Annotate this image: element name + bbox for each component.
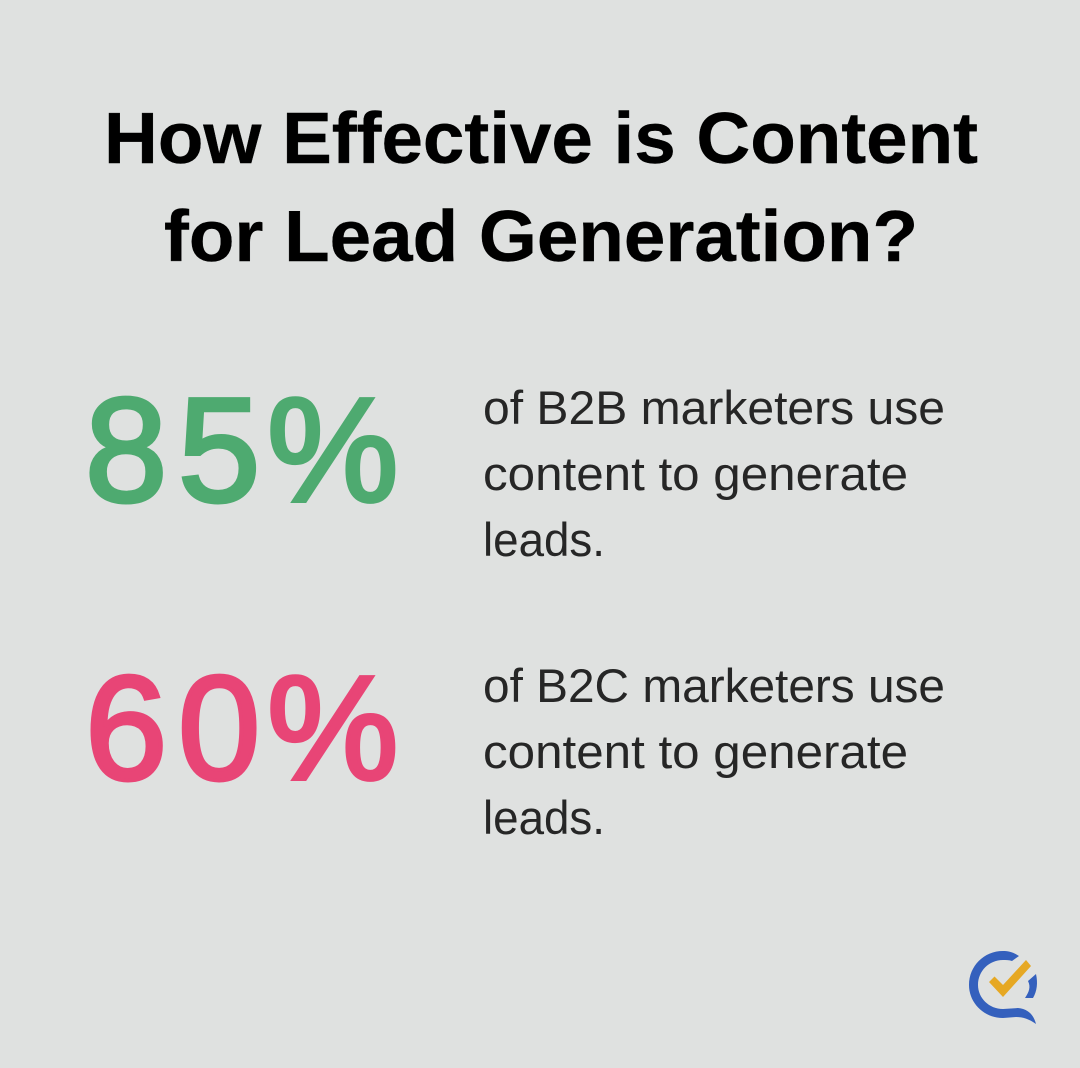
stat number: 60%: 60% xyxy=(85,646,399,811)
stat description: B2C: leads. xyxy=(483,791,605,844)
stat description: B2B xyxy=(483,381,945,566)
title: How Effective is Content xyxy=(104,99,978,179)
title: for Lead Generation? xyxy=(164,197,918,277)
stat description: B2C: content to generate xyxy=(483,725,908,778)
stat description: B2B: of B2B marketers use xyxy=(483,381,945,434)
stat description: B2C xyxy=(483,659,945,844)
stat description: B2B: leads. xyxy=(483,513,605,566)
stat number: 85%: 85% xyxy=(85,368,399,533)
title xyxy=(104,99,978,277)
stat description: B2B: content to generate xyxy=(483,447,908,500)
icon: logo speech bubble with check mark xyxy=(969,951,1037,1024)
stat: 60% of B2C marketers xyxy=(85,646,945,844)
stat description: B2C: of B2C marketers use xyxy=(483,659,945,712)
stat: 85% of B2B marketers xyxy=(85,368,945,566)
